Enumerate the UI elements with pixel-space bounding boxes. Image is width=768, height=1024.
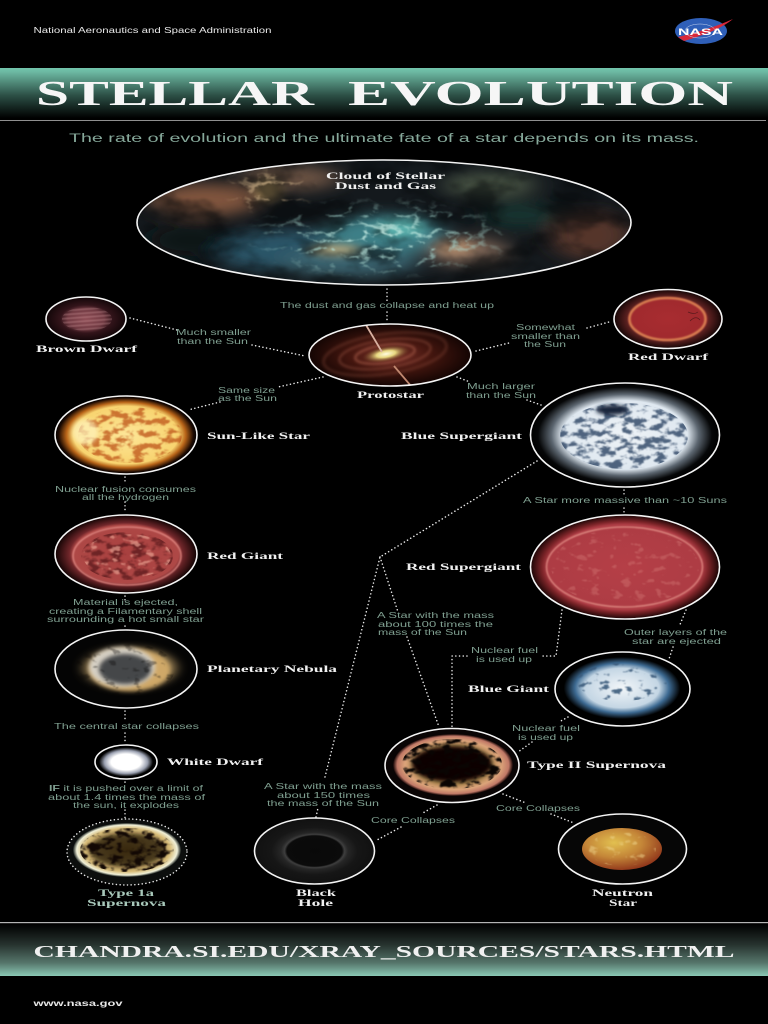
label: Black	[296, 888, 337, 899]
panel: black hole	[254, 818, 374, 909]
label: Star	[609, 898, 638, 909]
icon: NASA logo	[675, 18, 733, 44]
title: STELLAR	[36, 75, 316, 113]
website: www.nasa.gov	[32, 998, 123, 1008]
caption: star about 150 times: about 150 times	[277, 791, 370, 800]
panel: red supergiant	[406, 515, 720, 619]
caption: somewhat smaller than the sun	[511, 323, 580, 349]
panel: planetary nebula	[55, 630, 337, 708]
caption: outer layers ejected: star are ejected	[632, 637, 721, 646]
icon: NASA logo: NASA	[678, 27, 723, 38]
panel: type 1a supernova	[67, 819, 187, 909]
caption: much smaller than the sun	[176, 328, 252, 346]
panel: cloud of stellar dust and gas	[137, 160, 631, 285]
caption: dust and gas collapse: The dust and gas collapse and heat up	[280, 301, 495, 310]
panel: red giant	[55, 515, 284, 593]
label	[296, 888, 337, 909]
label: Red Supergiant	[406, 562, 522, 573]
agency name: National Aeronautics and Space Administration	[34, 26, 272, 35]
panel: red dwarf	[614, 290, 722, 363]
caption: core collapses (left): Core Collapses	[371, 816, 455, 825]
label	[592, 888, 654, 909]
subtitle: The rate of evolution and the ultimate fate of a star depends on its mass.	[69, 133, 699, 145]
caption: nuclear fuel used up (lower): is used up	[518, 733, 574, 742]
caption: pushed over limit: IF it is pushed over a limit of	[49, 784, 204, 793]
caption: nuclear fusion	[55, 485, 196, 502]
caption: nuclear fuel used up (upper): Nuclear fuel	[471, 646, 538, 655]
caption: nuclear fuel used up (lower)	[512, 724, 580, 742]
panel: blue supergiant	[401, 383, 720, 487]
caption: star about 150 times	[264, 782, 382, 808]
caption: star about 100 times: about 100 times the	[378, 620, 493, 629]
caption: same size as the sun	[218, 386, 277, 403]
label: White Dwarf	[167, 757, 264, 768]
caption: nuclear fuel used up (upper): is used up	[476, 655, 533, 664]
panel: brown dwarf	[36, 297, 138, 355]
label: Type 1a	[98, 888, 154, 899]
label: Brown Dwarf	[36, 344, 138, 355]
caption: star about 100 times	[377, 611, 494, 637]
panel: sun-like star	[55, 396, 311, 474]
label: Red Giant	[207, 551, 284, 562]
title	[36, 75, 733, 113]
caption: much larger than the sun: than the Sun	[466, 391, 536, 400]
label	[87, 888, 166, 909]
caption: same size as the sun: as the Sun	[218, 394, 277, 403]
label: Hole	[298, 898, 334, 909]
caption: star about 100 times: mass of the Sun	[378, 628, 467, 637]
caption: nuclear fuel used up (upper)	[471, 646, 538, 664]
caption: much larger than the sun: Much larger	[467, 382, 536, 391]
cloud label: Dust and Gas	[335, 181, 436, 192]
label: Blue Giant	[468, 684, 550, 695]
title: EVOLUTION	[348, 75, 733, 113]
caption: star about 150 times: the mass of the Sun	[267, 799, 379, 808]
panel: protostar	[309, 324, 471, 401]
label: Red Dwarf	[628, 352, 709, 363]
caption: material is ejected: Material is ejected,	[73, 598, 178, 607]
caption: more massive than 10 suns: A Star more massive than ~10 Suns	[523, 496, 727, 505]
label: Sun-Like Star	[207, 431, 311, 442]
caption: material is ejected: creating a Filamentary shell	[49, 607, 202, 616]
footer banner	[0, 922, 768, 976]
label: Supernova	[87, 898, 166, 909]
dotted connector lines	[125, 289, 686, 840]
caption: central star collapses: The central star collapses	[54, 722, 199, 731]
caption: much larger than the sun	[466, 382, 536, 400]
cloud label	[326, 171, 446, 192]
caption: somewhat smaller than the sun: Somewhat	[516, 323, 576, 332]
panel: neutron star	[558, 814, 686, 909]
caption: outer layers ejected	[624, 628, 727, 646]
title banner	[0, 68, 768, 121]
caption: much smaller than the sun: than the Sun	[177, 337, 248, 346]
caption: material is ejected: surrounding a hot small star	[47, 615, 205, 624]
caption: somewhat smaller than the sun: smaller than	[511, 332, 580, 341]
cloud label: Cloud of Stellar	[326, 171, 446, 182]
caption: nuclear fusion: all the hydrogen	[82, 493, 169, 502]
caption: somewhat smaller than the sun: the Sun	[524, 340, 566, 349]
label: Neutron	[592, 888, 654, 899]
caption: nuclear fuel used up (lower): Nuclear fuel	[512, 724, 580, 733]
caption: pushed over limit: about 1.4 times the mass of	[48, 793, 206, 802]
caption: material is ejected	[47, 598, 205, 624]
caption: core collapses (right): Core Collapses	[496, 804, 580, 813]
footer url: CHANDRA.SI.EDU/XRAY_SOURCES/STARS.HTML	[34, 942, 734, 961]
label: Blue Supergiant	[401, 431, 523, 442]
caption: star about 150 times: A Star with the mass	[264, 782, 382, 791]
caption: outer layers ejected: Outer layers of the	[624, 628, 727, 637]
label: Type II Supernova	[527, 760, 666, 771]
label: Planetary Nebula	[207, 664, 337, 675]
caption: star about 100 times: A Star with the mass	[377, 611, 494, 620]
label: Protostar	[357, 390, 425, 401]
caption: pushed over limit	[48, 784, 206, 810]
caption: same size as the sun: Same size	[218, 386, 275, 395]
panel: white dwarf	[95, 745, 264, 779]
panel: type II supernova	[385, 728, 666, 802]
panel: blue giant	[468, 652, 690, 726]
caption: much smaller than the sun: Much smaller	[176, 328, 252, 337]
caption: pushed over limit: the sun, it explodes	[73, 801, 179, 810]
caption: nuclear fusion: Nuclear fusion consumes	[55, 485, 196, 494]
